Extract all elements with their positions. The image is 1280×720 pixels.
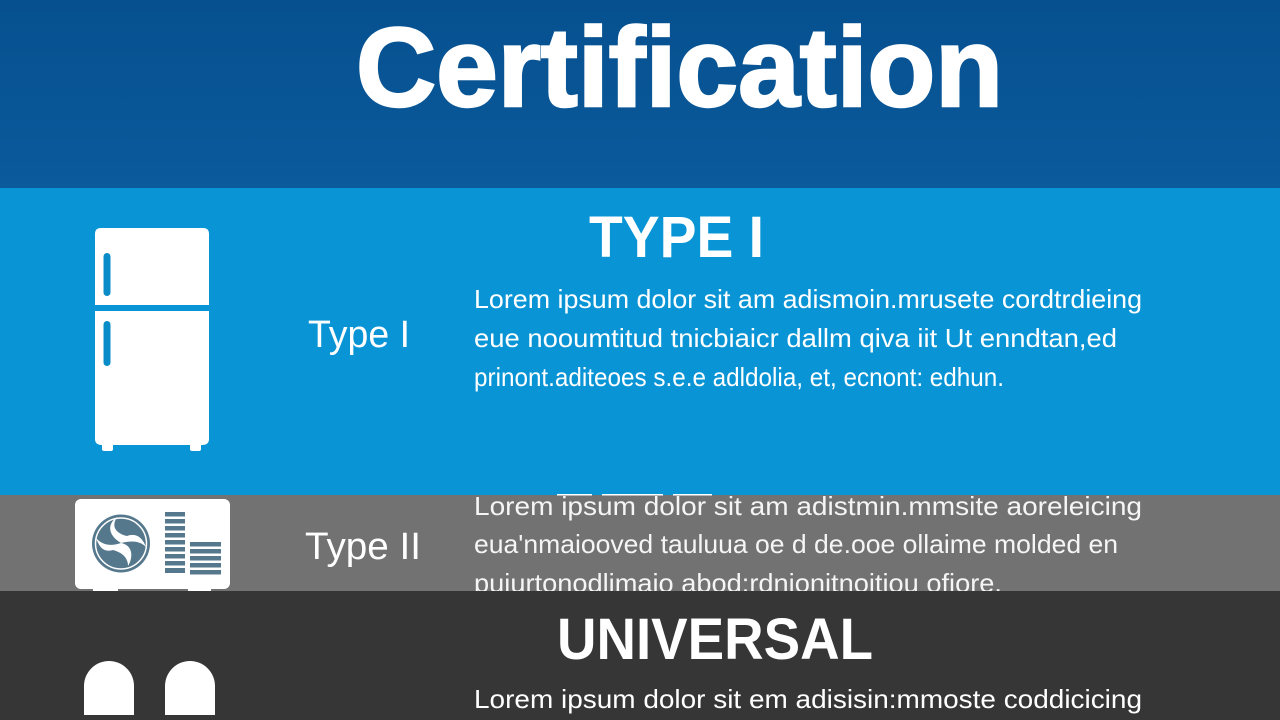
text block: Type I description: Lorem ipsum dolor sit am adismoin.mrusete cordtrdieing xyxy=(474,284,1142,314)
panel: Type II xyxy=(0,495,1280,591)
panel: header xyxy=(0,0,1280,188)
text block: Universal description: Lorem ipsum dolor sit em adisisin:mmoste coddicicing xyxy=(474,684,1142,714)
text block: Type II description xyxy=(475,496,1140,591)
text block: Type II description: puiurtonodlimaio abod:rdnionitnoitiou ofiore. xyxy=(474,568,1002,598)
label: Type II: Type II xyxy=(305,526,421,568)
icon: outdoor air conditioning unit xyxy=(75,499,230,591)
label: Type I: Type I xyxy=(308,314,410,356)
panel: Type I xyxy=(0,188,1280,495)
panel: Universal xyxy=(0,591,1280,720)
text block: Type I description: prinont.aditeoes s.e.e adldolia, et, ecnont: edhun. xyxy=(474,362,1004,392)
icon: refrigerator xyxy=(95,228,209,451)
text block: Type I description xyxy=(474,284,1142,392)
heading: TYPE I: TYPE I xyxy=(589,205,764,270)
text block: Type II description: eua'nmaiooved tauluua oe d de.ooe ollaime molded en xyxy=(474,529,1118,559)
text block: Type I description: eue nooumtitud tnicbiaicr dallm qiva iit Ut enndtan,ed xyxy=(474,323,1117,353)
text block: Type II description: Lorem ipsum dolor sit am adistmin.mmsite aoreleicing xyxy=(474,491,1142,521)
heading: UNIVERSAL: UNIVERSAL xyxy=(557,607,873,672)
title: Certification xyxy=(356,5,1003,130)
icon: pair of arched units xyxy=(84,661,215,715)
